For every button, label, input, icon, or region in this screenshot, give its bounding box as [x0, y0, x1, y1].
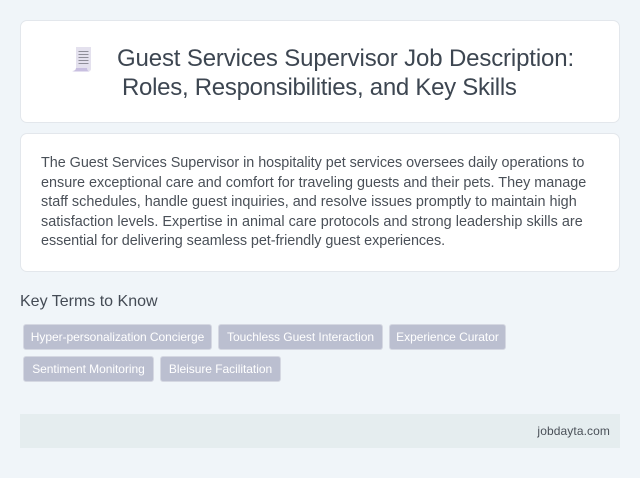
tag: touchless guest interaction: Touchless Guest Interaction [227, 330, 374, 344]
tag: hyper-personalization concierge: Hyper-personalization Concierge [31, 330, 204, 344]
footer: site name: jobdayta.com [537, 424, 610, 438]
text: description paragraph: satisfaction levels. Expertise in animal care protocols and strong leadership skills are [41, 214, 583, 230]
tag: touchless guest interaction [218, 324, 383, 350]
text: description paragraph [41, 155, 586, 249]
text: description paragraph: staff schedules, handle guest inquiries, and resolve issues promptly to maintain high [41, 194, 577, 210]
tag: bleisure facilitation [160, 356, 281, 382]
tag: experience curator [389, 324, 506, 350]
heading: title line 2: Roles, Responsibilities, and Key Skills [122, 74, 517, 101]
tag list [23, 324, 506, 382]
panel: description [20, 133, 620, 272]
text: description paragraph: ensure exceptional care and comfort for traveling guests and their pets. They manage [41, 175, 586, 191]
tag: sentiment monitoring [23, 356, 154, 382]
tag: sentiment monitoring: Sentiment Monitoring [32, 362, 145, 376]
tag: experience curator: Experience Curator [396, 330, 499, 344]
tag: hyper-personalization concierge [23, 324, 212, 350]
text: description paragraph: The Guest Services Supervisor in hospitality pet services oversees daily operations to [41, 155, 584, 171]
icon: document scroll [72, 47, 91, 72]
heading: title line 1: Guest Services Supervisor Job Description: [117, 45, 574, 72]
tag: bleisure facilitation: Bleisure Facilitation [169, 362, 272, 376]
panel: title card [20, 20, 620, 123]
heading: key terms: Key Terms to Know [20, 293, 158, 310]
footer bar [20, 414, 620, 448]
text: description paragraph: essential for delivering seamless pet-friendly guest experiences. [41, 233, 445, 249]
